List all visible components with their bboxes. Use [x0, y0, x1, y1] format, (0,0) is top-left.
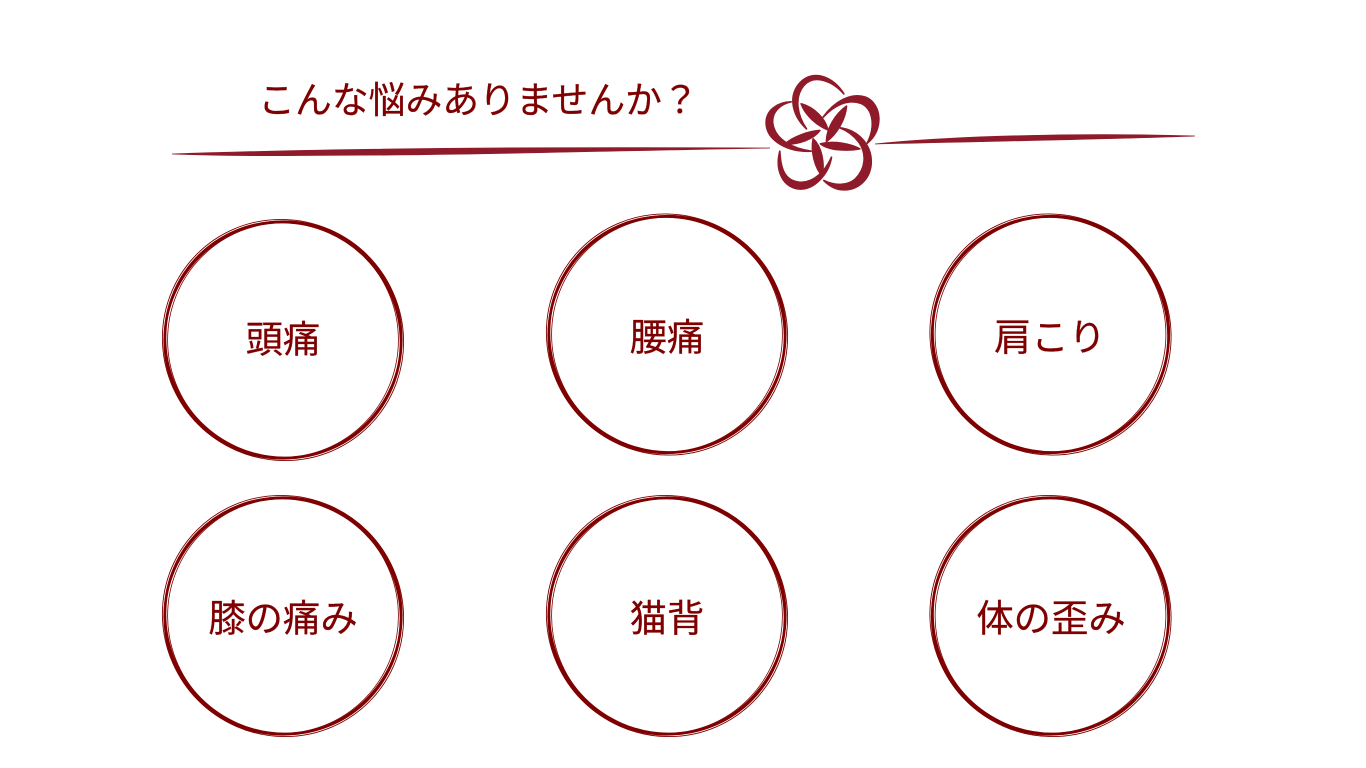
title: こんな悩みありませんか？: [258, 80, 699, 121]
circle: 腰痛: 腰痛: [630, 316, 704, 358]
circle: 猫背: 猫背: [630, 598, 704, 640]
circle: 膝の痛み: 膝の痛み: [208, 598, 358, 640]
circle: 猫背: [496, 445, 838, 768]
circle: 膝の痛み: [112, 445, 454, 768]
circle: 体の歪み: [880, 445, 1221, 768]
circle: 肩こり: 肩こり: [994, 316, 1106, 358]
circle: 腰痛: [496, 164, 838, 505]
circle: 頭痛: 頭痛: [246, 318, 320, 360]
circle: 体の歪み: 体の歪み: [976, 598, 1126, 640]
icon: plum blossom: [766, 76, 879, 190]
circle: 頭痛: [112, 169, 454, 511]
brush line left: [172, 148, 770, 156]
brush line right: [875, 135, 1195, 144]
circle: 肩こり: [880, 164, 1221, 505]
